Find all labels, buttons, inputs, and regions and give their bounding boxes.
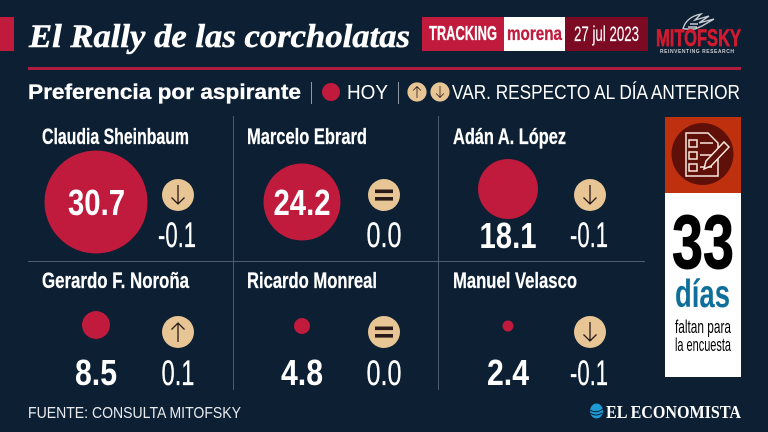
- legend heading: HOY: [347, 82, 388, 104]
- icon: checklist: [672, 123, 734, 185]
- candidate: Claudia Sheinbaum: Claudia Sheinbaum: [42, 124, 189, 149]
- candidate: Marcelo Ebrard: 0.0: [366, 216, 402, 255]
- title accent: [0, 17, 14, 51]
- candidate: Claudia Sheinbaum: 30.7: [68, 182, 125, 223]
- candidate: Ricardo Monreal: 0.0: [366, 354, 402, 393]
- candidate: Ricardo Monreal: 4.8: [281, 352, 323, 393]
- candidate: Marcelo Ebrard: 24.2: [274, 182, 330, 223]
- legend heading: Preferencia por aspirante: [28, 81, 301, 104]
- candidate: Ricardo Monreal: Ricardo Monreal: [247, 268, 377, 293]
- candidate: Adán A. López: [453, 124, 608, 256]
- candidate: Marcelo Ebrard: Marcelo Ebrard: [247, 124, 367, 149]
- candidate: Gerardo F. Noroña: 0.1: [162, 354, 194, 393]
- candidate: Manuel Velasco: [453, 268, 608, 393]
- candidate: Claudia Sheinbaum: -0.1: [158, 216, 196, 255]
- candidate: Manuel Velasco: Manuel Velasco: [453, 268, 577, 293]
- title: El Rally de las corcholatas: [28, 19, 410, 55]
- candidate: Adán A. López: Adán A. López: [453, 124, 566, 149]
- tracking badge: TRACKING: [429, 23, 497, 45]
- candidate: Gerardo F. Noroña: [42, 268, 194, 393]
- tracking badge: 27 jul 2023: [574, 23, 639, 46]
- candidate: Manuel Velasco: -0.1: [570, 354, 608, 393]
- source: FUENTE: CONSULTA MITOFSKY: [28, 405, 241, 422]
- legend heading: [28, 81, 740, 104]
- Mitofsky logo: REINVENTING RESEARCH: [660, 49, 734, 55]
- candidate: Marcelo Ebrard: [247, 124, 402, 255]
- candidate: Gerardo F. Noroña: Gerardo F. Noroña: [42, 268, 190, 293]
- panel: countdown: la encuesta: [675, 335, 732, 355]
- candidate: Claudia Sheinbaum: [42, 124, 196, 255]
- Mitofsky logo: [656, 14, 741, 55]
- panel: countdown: 33: [672, 200, 734, 285]
- panel: countdown: faltan para: [675, 317, 732, 337]
- tracking badge: [422, 17, 648, 51]
- logo: El Economista: EL ECONOMISTA: [606, 402, 741, 422]
- candidate: Adán A. López: 18.1: [480, 215, 536, 256]
- candidate: Manuel Velasco: 2.4: [487, 352, 529, 393]
- candidate: Ricardo Monreal: [247, 268, 402, 393]
- candidate: Gerardo F. Noroña: 8.5: [75, 352, 117, 393]
- tracking badge: morena: [507, 24, 562, 45]
- panel: countdown: [665, 117, 741, 377]
- candidate: Adán A. López: -0.1: [570, 216, 608, 255]
- panel: countdown: días: [675, 273, 730, 316]
